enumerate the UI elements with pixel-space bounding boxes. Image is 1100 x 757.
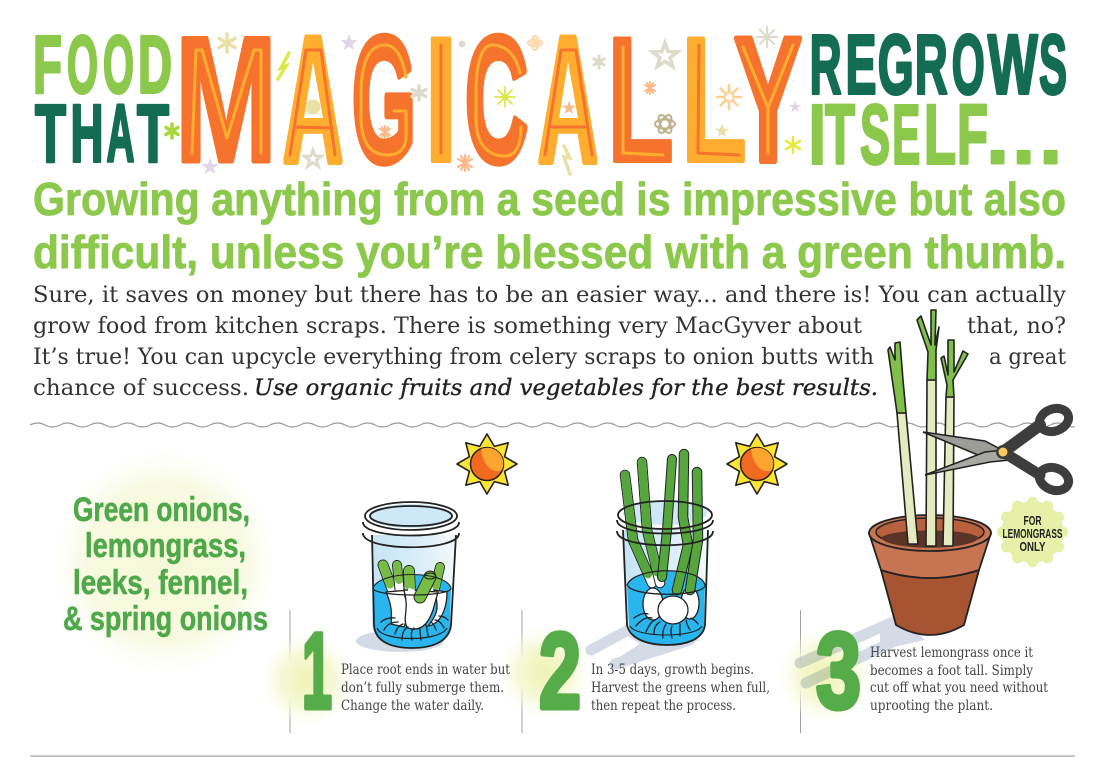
title: magically: I: [424, 0, 458, 199]
vegetable list: & spring onions: [63, 600, 268, 638]
step 2: 2: [539, 610, 581, 731]
title: magically: G: [352, 0, 416, 199]
title: magically: A: [283, 0, 343, 199]
step 3: cut off what you need without: [870, 680, 1048, 696]
title: food that: [33, 20, 172, 180]
illustration: lemongrass pot with scissors: [869, 310, 1072, 635]
title: magically: Y: [734, 0, 802, 199]
step 2: [539, 610, 770, 731]
title: food that: O: [67, 20, 98, 110]
vegetable list: Green onions,: [73, 491, 250, 529]
step 3: Harvest lemongrass once it: [870, 645, 1033, 661]
vegetable list: [63, 491, 268, 638]
title: regrows itself: E: [892, 88, 920, 182]
step 2: Harvest the greens when full,: [591, 680, 770, 696]
glow behind vegetable list: [53, 450, 277, 674]
step 1: Place root ends in water but: [341, 662, 510, 678]
badge: for lemongrass only: [997, 496, 1068, 568]
subheading: [33, 173, 1066, 278]
step 1: don’t fully submerge them.: [341, 680, 504, 696]
step 3: uprooting the plant.: [870, 698, 993, 714]
intro paragraph: Use organic fruits and vegetables for the best results.: [254, 376, 878, 401]
title: magically: L: [607, 0, 674, 199]
title: regrows itself: ...: [986, 88, 1062, 182]
title: food that: A: [106, 88, 134, 180]
title: magically: M: [175, 0, 277, 199]
vegetable list: leeks, fennel,: [73, 564, 248, 602]
title: regrows itself: F: [957, 88, 988, 182]
illustration: jar with regrown onions: [617, 454, 713, 645]
intro paragraph: Sure, it saves on money but there has to be an easier way... and there is! You can actually: [33, 283, 1067, 308]
title: food that: T: [35, 88, 66, 180]
title: food that: D: [138, 20, 172, 110]
title: magically: A: [538, 0, 598, 199]
icon: sun 2: [727, 434, 787, 494]
badge: for lemongrass only: LEMONGRASS: [1002, 527, 1062, 541]
step 3: [816, 610, 1048, 731]
title: food that: F: [33, 20, 62, 110]
step 1: [302, 610, 510, 731]
number glows and cast shadows: [261, 620, 925, 727]
title: food that: H: [70, 88, 104, 180]
intro paragraph: It’s true! You can upcycle everything from celery scraps to onion butts with: [33, 345, 874, 370]
title: food that: T: [137, 88, 169, 180]
icon: sun 1: [457, 434, 517, 494]
step 1: 1: [302, 610, 332, 731]
step 1: Change the water daily.: [341, 698, 484, 714]
badge: for lemongrass only: FOR: [1024, 514, 1042, 528]
illustration: jar with onion scraps: [363, 502, 459, 648]
title: regrows itself: [809, 18, 1067, 182]
intro paragraph: grow food from kitchen scraps. There is something very MacGyver about: [33, 314, 862, 339]
step 3: 3: [816, 610, 861, 731]
title: regrows itself: T: [825, 88, 855, 182]
counters of the letter A: [304, 62, 578, 118]
step 3: becomes a foot tall. Simply: [870, 663, 1033, 679]
decorative stars and sparkles: [166, 27, 801, 174]
title: magically: L: [681, 0, 747, 199]
badge: for lemongrass only: ONLY: [1020, 540, 1046, 554]
title: regrows itself: L: [924, 88, 956, 182]
title: food that: O: [103, 20, 134, 110]
title: magically: C: [465, 0, 528, 199]
text: S: [1039, 18, 1067, 112]
title: regrows itself: R: [810, 18, 842, 112]
intro paragraph: [33, 283, 1067, 401]
title: regrows itself: O: [952, 18, 985, 112]
intro paragraph: chance of success.: [33, 376, 249, 401]
title: regrows itself: I: [809, 88, 826, 182]
title: regrows itself: E: [846, 18, 876, 112]
vegetable list: lemongrass,: [85, 527, 246, 565]
inline stripes on magically letters: [192, 45, 793, 156]
title: regrows itself: S: [860, 88, 890, 182]
intro paragraph: a great: [989, 345, 1066, 370]
title: regrows itself: W: [988, 18, 1038, 112]
title: regrows itself: R: [915, 18, 948, 112]
step 2: In 3-5 days, growth begins.: [591, 662, 754, 678]
title: regrows itself: G: [878, 18, 914, 112]
step 2: then repeat the process.: [591, 698, 736, 714]
intro paragraph: that, no?: [967, 314, 1066, 339]
